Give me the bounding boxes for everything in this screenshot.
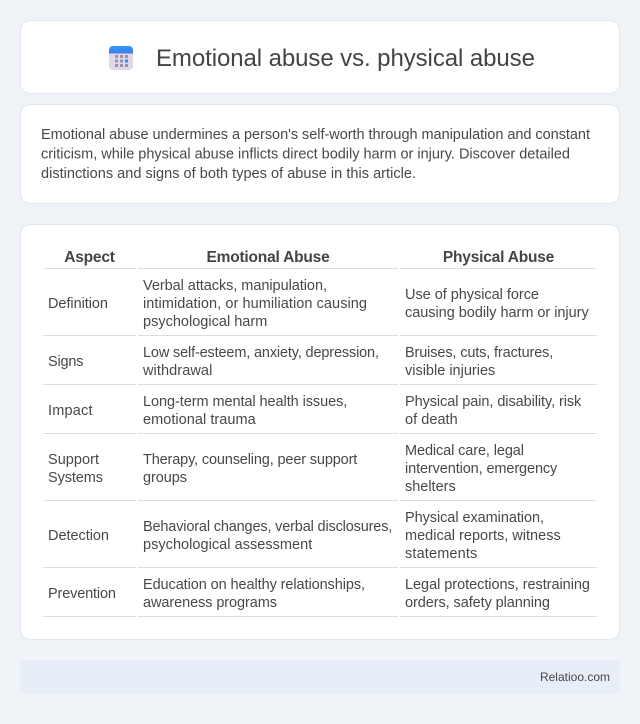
row: Support Systems <box>48 443 558 495</box>
title: Emotional abuse vs. physical abuse <box>156 45 535 72</box>
row: Support Systems: Therapy, counseling, peer support <box>143 452 357 468</box>
header: Physical Abuse: Physical Abuse <box>443 249 554 266</box>
row: Signs: visible injuries <box>405 363 495 379</box>
row: Signs: Bruises, cuts, fractures, <box>405 345 553 361</box>
row: Impact: emotional trauma <box>143 412 257 428</box>
row: Definition: psychological harm <box>143 314 267 330</box>
row: Impact: Physical pain, disability, risk <box>405 394 582 410</box>
row: Detection: statements <box>405 546 477 562</box>
row: Signs <box>48 345 553 379</box>
row: Support Systems: intervention, emergency <box>405 461 558 477</box>
row: Support Systems: groups <box>143 470 187 486</box>
row: Support Systems: shelters <box>405 479 456 495</box>
row: Signs: Signs <box>48 354 84 370</box>
row: Definition: Use of physical force <box>405 287 539 303</box>
row: Detection: Physical examination, <box>405 510 544 526</box>
intro paragraph: distinctions and signs of both types of abuse in this article. <box>41 166 416 182</box>
row: Signs: Low self-esteem, anxiety, depression, <box>143 345 379 361</box>
row: Prevention: Prevention <box>48 586 116 602</box>
row: Support Systems: Systems <box>48 470 103 486</box>
footer credit: Relatioo.com <box>540 670 610 684</box>
row: Signs: withdrawal <box>142 363 212 379</box>
header: Aspect: Aspect <box>64 249 115 266</box>
row: Definition <box>48 278 589 330</box>
row: Impact: Impact <box>48 403 92 419</box>
row: Definition: Definition <box>48 296 108 312</box>
panel: intro text card <box>20 104 620 204</box>
intro paragraph <box>41 127 590 182</box>
row: Detection: Behavioral changes, verbal disclosures, <box>143 519 392 535</box>
row: Support Systems: Support <box>48 452 99 468</box>
intro paragraph: Emotional abuse undermines a person's self-worth through manipulation and constant <box>41 127 590 143</box>
row: Definition: intimidation, or humiliation causing <box>143 296 367 312</box>
row: Definition: Verbal attacks, manipulation, <box>143 278 327 294</box>
row: Support Systems: Medical care, legal <box>405 443 524 459</box>
row: Prevention: Education on healthy relationships, <box>143 577 365 593</box>
panel: title card <box>20 20 620 94</box>
row: Prevention: Legal protections, restraining <box>405 577 590 593</box>
row: Definition: causing bodily harm or injury <box>405 305 589 321</box>
table body text <box>48 278 590 611</box>
row: Impact: of death <box>405 412 458 428</box>
comparison table <box>43 249 597 617</box>
row: Detection <box>48 510 561 562</box>
row: Detection: Detection <box>48 528 109 544</box>
panel: comparison table card <box>20 224 620 640</box>
intro paragraph: criticism, while physical abuse inflicts direct bodily harm or injury. Discover detailed <box>41 146 570 162</box>
row: Impact <box>48 394 582 428</box>
icon: calendar <box>109 46 133 70</box>
header: Emotional Abuse: Emotional Abuse <box>206 249 330 266</box>
row: Prevention: orders, safety planning <box>405 595 550 611</box>
row: Detection: medical reports, witness <box>405 528 561 544</box>
row: Detection: psychological assessment <box>143 537 312 553</box>
row: Prevention: awareness programs <box>143 595 277 611</box>
footer bar <box>20 660 620 694</box>
row: Impact: Long-term mental health issues, <box>143 394 347 410</box>
row: Prevention <box>48 577 590 611</box>
